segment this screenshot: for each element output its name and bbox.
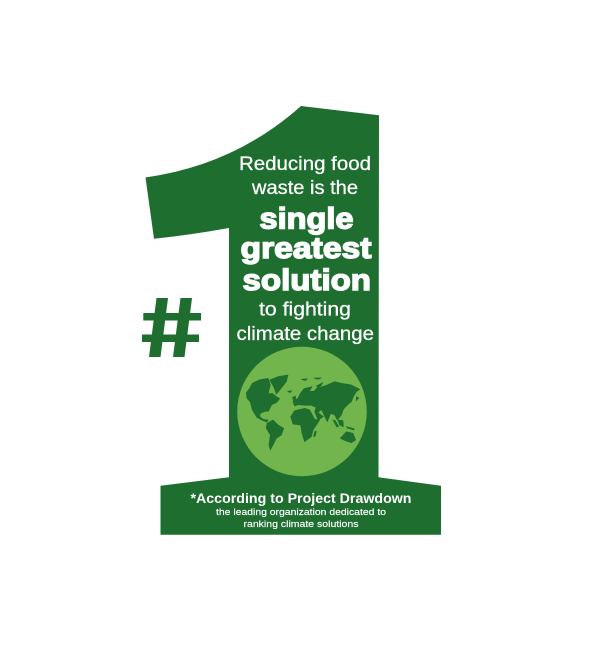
hash symbol — [142, 298, 201, 357]
headline text: Reducing food — [239, 154, 371, 175]
world map: Eurasia, Africa, Australia — [291, 378, 360, 443]
headline text: solution — [242, 264, 371, 297]
footnote text — [190, 491, 412, 530]
headline text: single — [260, 202, 354, 236]
headline text: climate change — [236, 324, 374, 345]
footnote text: *According to Project Drawdown — [190, 491, 412, 506]
headline text: to fighting — [259, 300, 351, 320]
headline text: greatest — [240, 232, 372, 265]
headline text: waste is the — [251, 178, 358, 199]
headline text — [236, 154, 374, 345]
world map: Americas — [246, 375, 292, 450]
numeral one shape — [146, 106, 441, 535]
footnote text: ranking climate solutions — [244, 519, 359, 530]
icon: globe — [237, 347, 367, 476]
footnote text: the leading organization dedicated to — [216, 507, 386, 518]
